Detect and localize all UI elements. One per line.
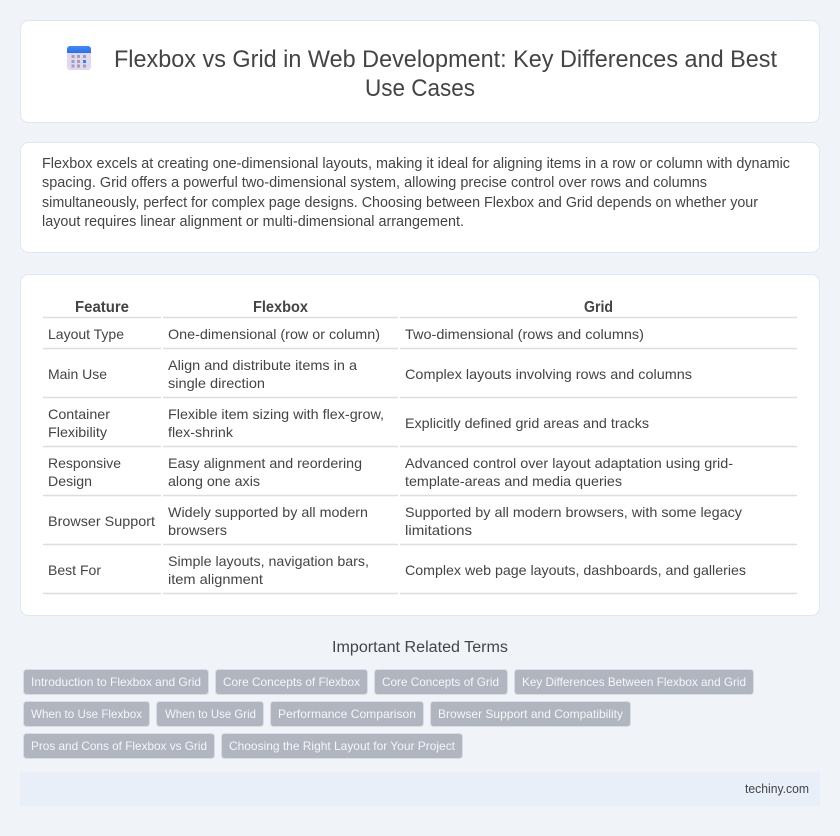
intro text [42, 156, 790, 230]
icon: calendar grid [67, 46, 91, 70]
tag: core flexbox [216, 670, 368, 694]
row: best for: Simple layouts, navigation bars, [168, 553, 369, 569]
comparison table panel [20, 274, 820, 616]
row: main use: Align and distribute items in a [168, 357, 357, 373]
tag: key differences [514, 670, 754, 694]
row: browser support: browsers [168, 522, 227, 538]
table header row [75, 299, 613, 316]
header panel [20, 20, 820, 122]
row: responsive design: Easy alignment and reordering [168, 455, 362, 471]
tag: pros and cons [24, 734, 214, 758]
tag: choosing layout [222, 734, 462, 758]
tag: core flexbox: Core Concepts of Flexbox [223, 675, 360, 689]
row: container flexibility: Flexible item sizing with flex-grow, [168, 406, 384, 422]
row: responsive design: along one axis [168, 473, 260, 489]
tag: browser support: Browser Support and Compatibility [438, 707, 623, 721]
tag: choosing layout: Choosing the Right Layout for Your Project [229, 739, 456, 753]
row: container flexibility: Flexibility [48, 424, 107, 440]
row: responsive design: template-areas and media queries [405, 473, 622, 489]
row: container flexibility: Container [48, 406, 110, 422]
tag: introduction [24, 670, 208, 694]
row: responsive design: Design [48, 473, 92, 489]
row: best for: Best For [48, 562, 101, 578]
row: best for [48, 553, 746, 587]
table header row: Grid [584, 299, 613, 316]
row: main use: Complex layouts involving rows and columns [405, 366, 692, 382]
tag: pros and cons: Pros and Cons of Flexbox vs Grid [31, 739, 207, 753]
row: container flexibility [48, 406, 649, 440]
tag: key differences: Key Differences Between Flexbox and Grid [522, 675, 746, 689]
table header row: Flexbox [253, 299, 308, 316]
tag: performance [270, 702, 424, 726]
tag: performance: Performance Comparison [278, 707, 416, 721]
row: responsive design: Responsive [48, 455, 121, 471]
related term tags [24, 670, 754, 758]
tag: introduction: Introduction to Flexbox and Grid [31, 675, 201, 689]
tag: when flexbox: When to Use Flexbox [31, 707, 142, 721]
tag: when flexbox [24, 702, 150, 726]
tag: core grid: Core Concepts of Grid [382, 675, 499, 689]
footer source: techiny.com [745, 781, 809, 796]
row: container flexibility: Explicitly defined grid areas and tracks [405, 415, 649, 431]
row: browser support: Supported by all modern browsers, with some legacy [405, 504, 742, 520]
row: best for: Complex web page layouts, dashboards, and galleries [405, 562, 746, 578]
tag: core grid [374, 670, 508, 694]
row: responsive design: Advanced control over layout adaptation using grid- [405, 455, 733, 471]
intro panel [20, 142, 820, 252]
intro text: layout requires linear alignment or multi-dimensional arrangement. [42, 214, 464, 230]
intro text: simultaneously, perfect for complex page designs. Choosing between Flexbox and Grid depends on whether your [42, 195, 758, 211]
related terms heading: Important Related Terms [332, 639, 508, 656]
row: layout type: Layout Type [48, 326, 124, 342]
row: main use: single direction [168, 375, 265, 391]
row: layout type: One-dimensional (row or column) [168, 326, 380, 342]
title: Use Cases [365, 75, 475, 102]
row: browser support: limitations [405, 522, 472, 538]
row: main use [48, 357, 692, 391]
tag: browser support [430, 702, 630, 726]
footer bar [20, 772, 820, 806]
tag: when grid [156, 702, 264, 726]
intro text: spacing. Grid offers a powerful two-dimensional system, allowing precise control over rows and columns [42, 175, 707, 191]
row: responsive design [48, 455, 733, 489]
table header row: Feature [75, 299, 129, 316]
row: best for: item alignment [168, 571, 263, 587]
row: browser support [48, 504, 742, 538]
title: Flexbox vs Grid in Web Development: Key Differences and Best [114, 46, 777, 73]
row: layout type: Two-dimensional (rows and columns) [405, 326, 644, 342]
tag: when grid: When to Use Grid [165, 707, 256, 721]
row: browser support: Widely supported by all modern [168, 504, 368, 520]
title [114, 46, 777, 102]
row: browser support: Browser Support [48, 513, 155, 529]
row: container flexibility: flex-shrink [168, 424, 234, 440]
row: main use: Main Use [48, 366, 107, 382]
intro text: Flexbox excels at creating one-dimensional layouts, making it ideal for aligning items in a row or column with dynamic [42, 156, 790, 172]
row: layout type [48, 326, 644, 342]
